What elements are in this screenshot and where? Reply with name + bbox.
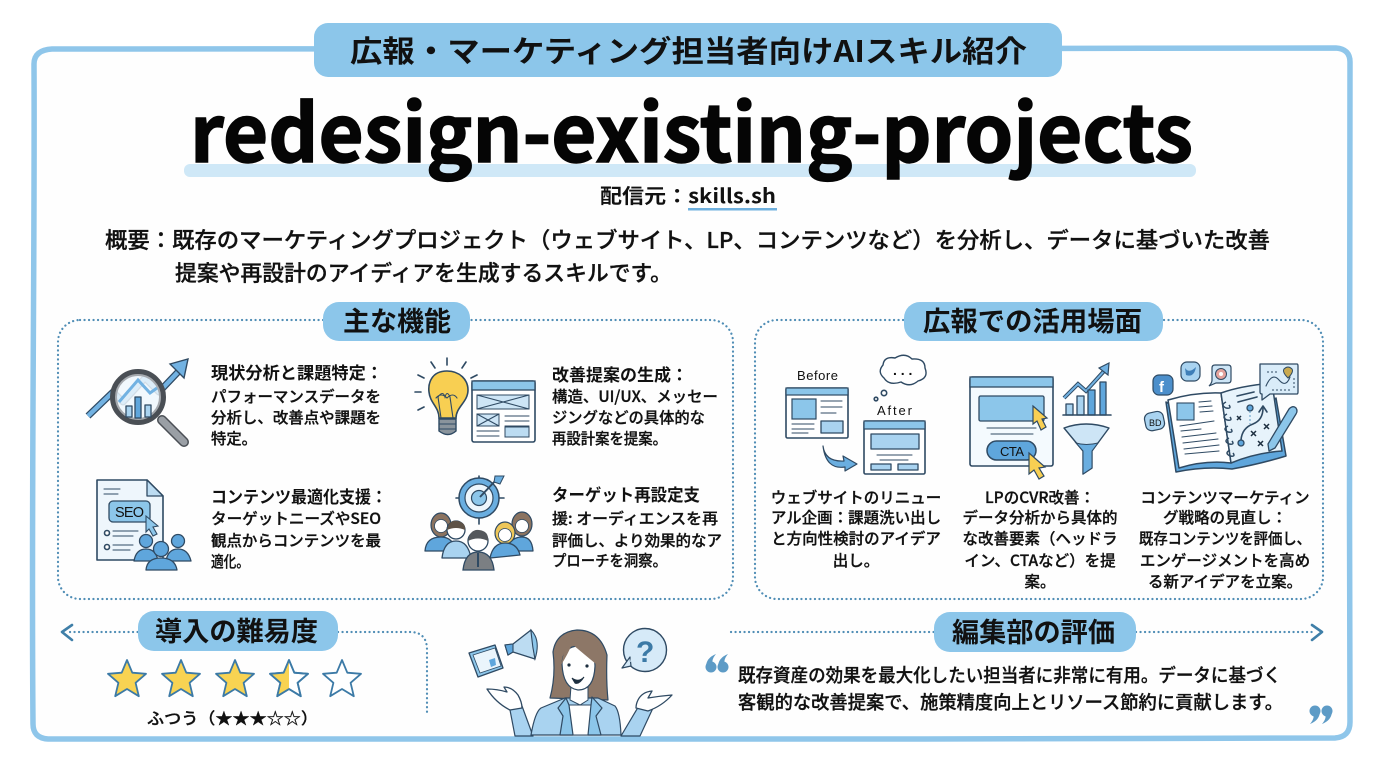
arrow: right — [1312, 625, 1322, 640]
caption: content marketing strategy: エンゲージメントを高め — [1140, 549, 1310, 571]
summary text: 提案や再設計のアイディアを生成するスキルです。 — [175, 256, 672, 288]
review text: 客観的な改善提案で、施策精度向上とリソース節約に貢献します。 — [738, 689, 1283, 715]
panel: editorial review — [706, 611, 1332, 724]
caption: website renewal — [771, 486, 941, 571]
quote mark: close — [1310, 706, 1332, 724]
caption: website renewal: 出し。 — [833, 549, 879, 571]
feature text: improvement proposals: 改善提案の生成： — [552, 361, 688, 386]
lapels — [558, 697, 602, 735]
feature text: current analysis: 特定。 — [211, 427, 257, 449]
feature text: improvement proposals: 構造、UI/UX、メッセー — [552, 385, 718, 407]
jacket — [531, 698, 621, 735]
feature text: current analysis — [211, 359, 383, 449]
icon: SEO document with people — [97, 480, 191, 570]
icon: strategy notebook and social icons — [1143, 362, 1298, 472]
icon: magnifier with chart — [88, 359, 188, 442]
caption: website renewal: と方向性検討のアイデア — [771, 527, 941, 549]
caption: LP CVR improvement: 案。 — [1024, 570, 1056, 592]
feature text: retargeting: プローチを洞察。 — [552, 549, 667, 571]
main title: redesign-existing-projects — [190, 70, 1193, 185]
icon: strategy notebook and social icons: f — [1159, 379, 1165, 396]
icon: target and audience — [425, 476, 533, 570]
caption: LP CVR improvement: データ分析から具体的 — [962, 506, 1118, 528]
illustration: woman presenting: ? — [636, 636, 654, 669]
panel: PR use cases — [755, 300, 1323, 599]
feature text: retargeting: 評価し、より効果的なア — [552, 529, 722, 551]
feature text: retargeting: ターゲット再設定支 — [552, 481, 700, 506]
feature text: retargeting — [552, 481, 722, 571]
caption: LP CVR improvement — [962, 486, 1118, 592]
heading: main features: 主な機能 — [343, 300, 451, 339]
icon: strategy notebook and social icons: BD — [1149, 418, 1162, 428]
icon: landing page CTA, chart and funnel: CTA — [1000, 444, 1024, 459]
heading: difficulty: 導入の難易度 — [155, 610, 318, 649]
caption: website renewal: ウェブサイトのリニュー — [771, 486, 941, 508]
icon: before and after windows: . . . — [893, 362, 912, 378]
megaphone — [505, 630, 535, 659]
icon: before and after windows: Before — [797, 368, 838, 383]
shirt — [564, 705, 597, 735]
heading: main features — [323, 300, 470, 341]
feature text: current analysis: パフォーマンスデータを — [211, 385, 381, 407]
sleeves — [510, 704, 653, 736]
illustration: woman presenting — [469, 628, 672, 736]
review text — [738, 662, 1283, 715]
feature text: content optimization: 適化。 — [211, 550, 249, 572]
feature text: improvement proposals: ジングなどの具体的な — [552, 406, 705, 428]
feature text: content optimization: コンテンツ最適化支援： — [211, 483, 387, 508]
face — [562, 646, 595, 690]
arrow: left — [62, 625, 72, 640]
star rating — [108, 660, 361, 696]
feature text: content optimization: 観点からコンテンツを最 — [211, 529, 381, 551]
feature text: current analysis: 分析し、改善点や課題を — [211, 406, 381, 428]
feature text: improvement proposals — [552, 361, 718, 449]
heading: editorial review: 編集部の評価 — [952, 611, 1115, 650]
caption: LP CVR improvement: イン、CTAなど）を提 — [964, 549, 1116, 571]
caption: website renewal: アル企画：課題洗い出し — [771, 506, 941, 528]
caption: content marketing strategy: グ戦略の見直し： — [1163, 506, 1287, 528]
hair back — [550, 630, 608, 700]
feature text: content optimization — [211, 483, 387, 572]
fringe — [561, 638, 598, 665]
hands — [487, 687, 522, 710]
question bubble — [624, 628, 666, 672]
icon: landing page CTA, chart and funnel — [970, 363, 1111, 479]
icon: SEO document with people: SEO — [115, 505, 144, 521]
difficulty label: ふつう（★★★☆☆） — [147, 705, 318, 729]
neck — [570, 686, 588, 705]
icon: before and after windows — [786, 355, 926, 474]
summary text — [105, 223, 1270, 288]
heading: PR use cases: 広報での活用場面 — [923, 300, 1142, 339]
icon: before and after windows: After — [877, 403, 913, 418]
caption: content marketing strategy: る新アイデアを立案。 — [1148, 570, 1302, 592]
quote mark: open — [706, 654, 728, 672]
tablet — [469, 645, 503, 677]
caption: content marketing strategy — [1139, 486, 1311, 592]
source line: 配信元：skills.sh — [600, 180, 776, 209]
feature text: retargeting: 援: オーディエンスを再 — [552, 507, 718, 529]
eyes — [567, 663, 589, 683]
title pill — [314, 23, 1062, 77]
caption: content marketing strategy: 既存コンテンツを評価し、 — [1139, 527, 1311, 549]
icon: light bulb and wireframe — [415, 358, 535, 442]
review text: 既存資産の効果を最大化したい担当者に非常に有用。データに基づく — [738, 662, 1281, 688]
panel: difficulty — [62, 610, 427, 729]
caption: LP CVR improvement: LPのCVR改善： — [985, 486, 1095, 508]
feature text: content optimization: ターゲットニーズやSEO — [211, 507, 381, 529]
summary text: 概要：既存のマーケティングプロジェクト（ウェブサイト、LP、コンテンツなど）を分析し、データに基づいた改善 — [105, 223, 1270, 255]
caption: LP CVR improvement: な改善要素（ヘッドラ — [962, 527, 1118, 549]
feature text: improvement proposals: 再設計案を提案。 — [552, 427, 667, 449]
feature text: current analysis: 現状分析と課題特定： — [211, 359, 383, 384]
title pill: 広報・マーケティング担当者向けAIスキル紹介 — [350, 27, 1027, 71]
panel: main features — [58, 300, 733, 599]
caption: content marketing strategy: コンテンツマーケティン — [1140, 486, 1310, 508]
